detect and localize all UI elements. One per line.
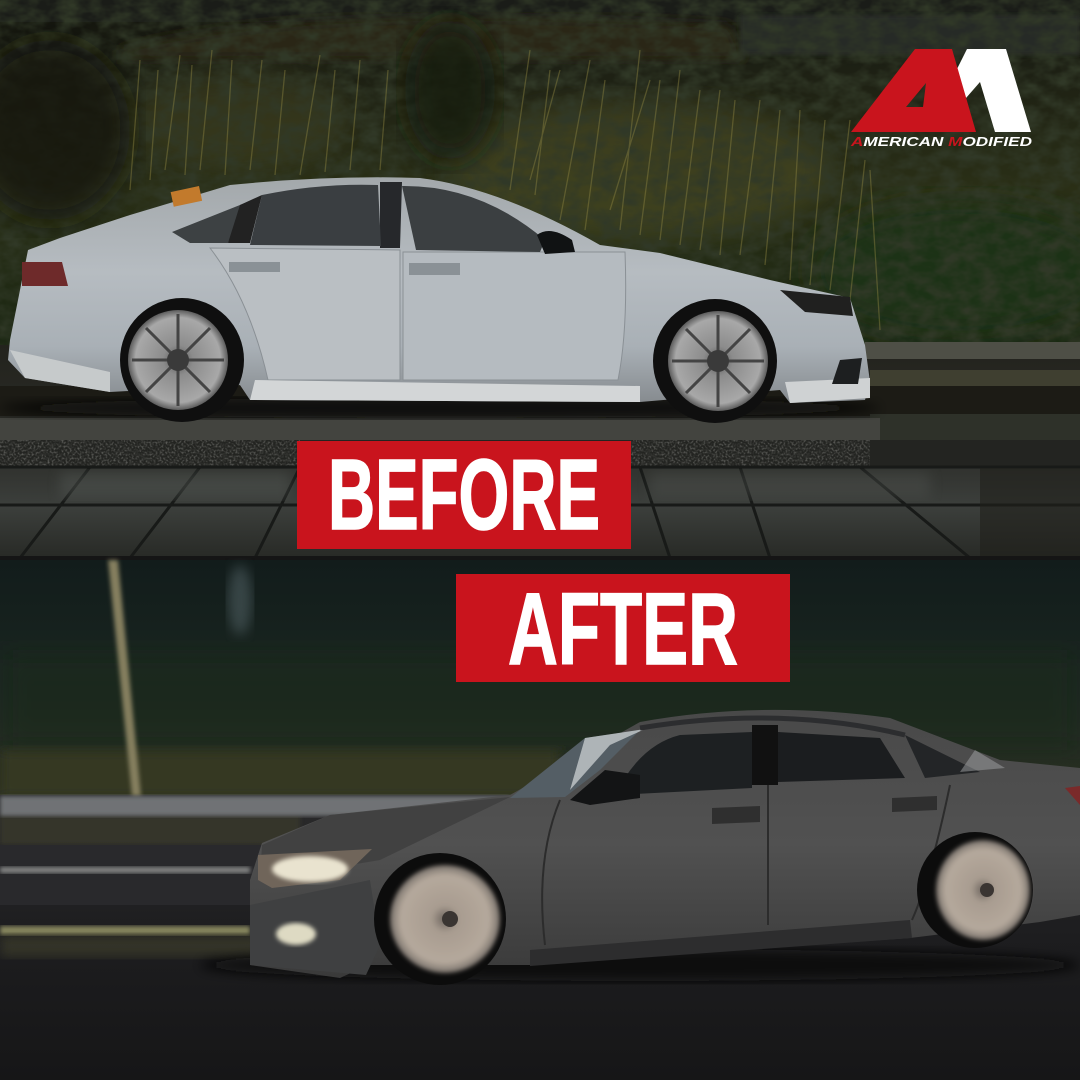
windows <box>250 185 381 246</box>
panel: before photo <box>0 0 1080 560</box>
guard rail <box>0 796 510 816</box>
logo mark: red A <box>851 49 976 132</box>
mirror <box>570 770 640 805</box>
handles <box>229 262 280 272</box>
label: before: BEFORE <box>328 439 600 551</box>
handles <box>712 806 760 824</box>
lights and marker <box>22 262 68 286</box>
car body <box>8 177 870 403</box>
silver sedan <box>0 177 880 423</box>
car body <box>250 710 1080 978</box>
label: after: AFTER <box>508 572 738 686</box>
mirror <box>537 231 575 254</box>
label: before <box>297 439 631 551</box>
road <box>0 795 1080 1080</box>
wet pavement <box>0 342 1080 560</box>
rear wheel <box>917 832 1033 948</box>
lamp post <box>108 560 141 796</box>
logo: American Modified <box>850 49 1032 149</box>
panel: after photo <box>0 560 1080 1080</box>
blurred treeline <box>0 560 1080 800</box>
door panels <box>210 248 400 380</box>
logo mark: white leg <box>957 49 1031 132</box>
front wheel <box>374 853 506 985</box>
lights <box>258 849 372 888</box>
rear wheel <box>120 298 244 422</box>
front wheel <box>653 299 777 423</box>
door lines <box>542 785 950 945</box>
gray sedan <box>200 710 1080 985</box>
logo wordmark: A MERICAN M ODIFIED <box>850 135 1032 149</box>
windows <box>510 730 640 798</box>
foliage background <box>0 0 1080 345</box>
